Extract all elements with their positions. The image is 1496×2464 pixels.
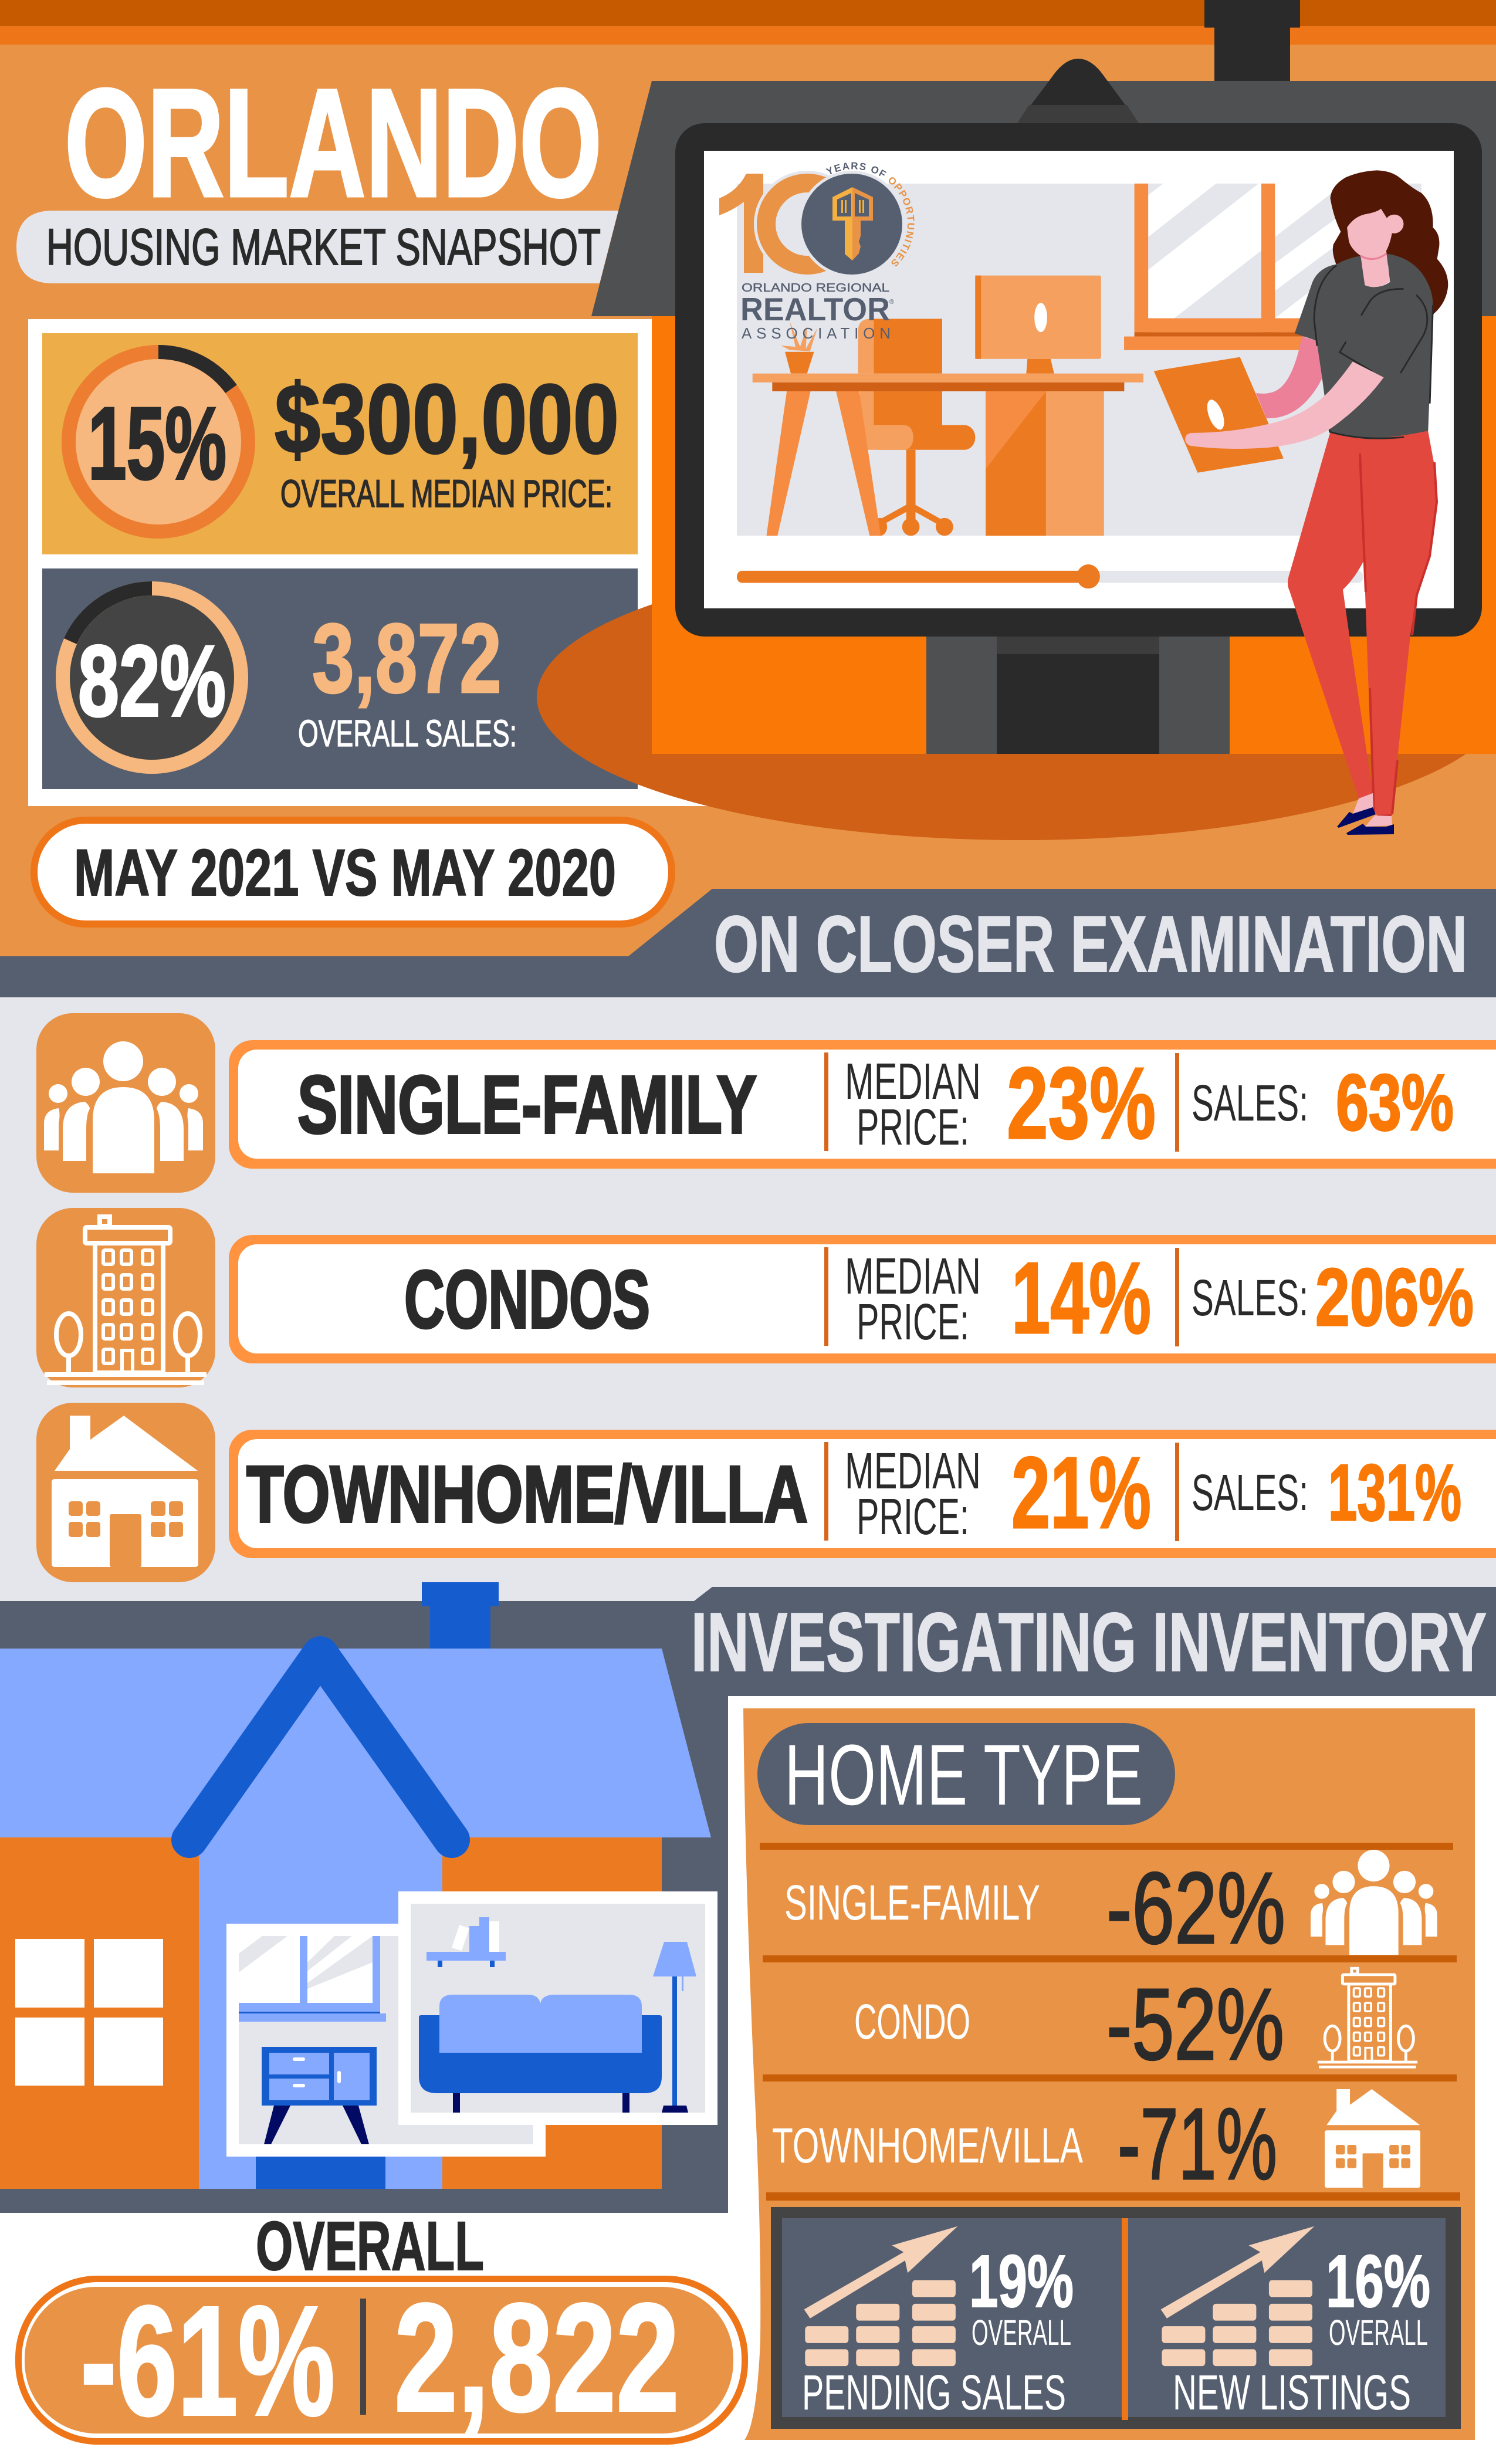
date pill — [31, 817, 675, 928]
neck — [1360, 251, 1390, 287]
roof — [0, 1649, 711, 1837]
panel: overall median price: OVERALL MEDIAN PRICE: — [280, 472, 612, 515]
panel: overall median price: 15% — [88, 387, 226, 501]
logo: Orlando Regional Realtor Association 100 years: ASSOCIATION — [742, 324, 891, 342]
ceiling with chimney mount — [591, 0, 1496, 316]
front arm — [1185, 361, 1384, 449]
row: single-family: SINGLE-FAMILY — [297, 1058, 757, 1150]
chart icon: pending sales — [804, 2226, 957, 2366]
panel: overall sales: 82% — [78, 625, 226, 737]
subtitle pill: HOUSING MARKET SNAPSHOT — [46, 219, 601, 276]
townhome inventory row: -71% — [1118, 2087, 1277, 2201]
header section background — [0, 0, 1496, 962]
plant — [781, 321, 817, 374]
overall heading: OVERALL — [256, 2208, 484, 2285]
panel: home type — [743, 1708, 1475, 2440]
row: condos: PRICE: — [857, 1294, 969, 1351]
room: cabinet — [226, 1924, 546, 2157]
panel: overall sales — [42, 568, 638, 789]
panel: overall median price: $300,000 — [275, 364, 619, 474]
panel: pending sales and new listings — [771, 2207, 1461, 2429]
panel: overall sales: OVERALL SALES: — [298, 712, 517, 754]
roof gable — [189, 1654, 452, 1840]
panel: pending sales and new listings: 19% — [969, 2240, 1074, 2323]
section band: on closer examination — [0, 889, 1496, 997]
house window — [15, 1939, 163, 2086]
title: ORLANDO — [65, 57, 602, 229]
single-family inventory row: -62% — [1106, 1851, 1285, 1965]
townhome inventory row — [772, 2087, 1420, 2201]
icon tile: house — [36, 1403, 215, 1582]
panel: pending sales and new listings: 16% — [1326, 2240, 1430, 2323]
panel: overall sales: 3,872 — [312, 603, 502, 713]
room: sofa — [398, 1891, 717, 2125]
panel: white stats frame — [28, 319, 732, 806]
row: single-family: 23% — [1007, 1046, 1156, 1160]
row: townhome/villa: TOWNHOME/VILLA — [246, 1450, 808, 1539]
logo: Orlando Regional Realtor Association 100 years — [719, 162, 915, 342]
logo: Orlando Regional Realtor Association 100 years: YEARS OF OPPORTUNITIES — [825, 162, 915, 266]
row: single-family: PRICE: — [857, 1099, 969, 1156]
chair — [858, 319, 975, 536]
home type pill — [757, 1723, 1175, 1825]
row: condos: MEDIAN — [845, 1248, 981, 1305]
townhome inventory row: TOWNHOME/VILLA — [772, 2118, 1083, 2173]
subtitle pill — [16, 211, 618, 283]
desktop computer — [975, 276, 1101, 374]
row: condos: SALES: — [1192, 1270, 1308, 1326]
hair — [1330, 170, 1448, 314]
row: townhome/villa: SALES: — [1192, 1464, 1308, 1521]
row: condos — [36, 1208, 1496, 1387]
row: condos: 14% — [1011, 1241, 1151, 1355]
row: single-family — [36, 1013, 1496, 1193]
logo: Orlando Regional Realtor Association 100 years: ORLANDO REGIONAL — [742, 282, 889, 295]
illustration: house cutaway — [0, 1582, 717, 2189]
section band: investigating inventory — [0, 1587, 1496, 2213]
panel: overall median price — [42, 333, 638, 554]
condo inventory row: CONDO — [854, 1994, 970, 2049]
condo inventory row: -52% — [1106, 1967, 1284, 2081]
comparison section background — [0, 997, 1496, 1602]
row: townhome/villa: PRICE: — [857, 1488, 969, 1545]
date pill: MAY 2021 VS MAY 2020 — [74, 836, 616, 909]
monitor stand — [926, 637, 1230, 754]
face — [1347, 209, 1392, 256]
shirt seams — [1314, 265, 1433, 438]
row: condos: CONDOS — [404, 1253, 650, 1345]
overall stats pill: 2,822 — [394, 2272, 679, 2443]
key icon — [832, 187, 873, 260]
single-family inventory row — [784, 1850, 1437, 1965]
row: townhome/villa: MEDIAN — [845, 1443, 981, 1500]
panel: pending sales and new listings: OVERALL — [1329, 2313, 1428, 2353]
home type pill: HOME TYPE — [784, 1727, 1143, 1823]
office wall — [652, 316, 1496, 754]
overall stats pill — [15, 2272, 748, 2448]
overall stats pill: -61% — [80, 2274, 335, 2448]
chart icon: new listings — [1161, 2226, 1314, 2366]
logo: Orlando Regional Realtor Association 100 years: REALTOR — [740, 291, 890, 327]
tablet — [1154, 357, 1284, 473]
illustration: window on screen — [1124, 184, 1421, 350]
icon tile: building — [36, 1208, 215, 1387]
panel: pending sales and new listings: PENDING SALES — [802, 2365, 1066, 2420]
row: single-family: SALES: — [1192, 1075, 1308, 1132]
shirt — [1295, 253, 1433, 439]
woman: legs and shoes — [1288, 431, 1437, 835]
condo inventory row — [854, 1967, 1417, 2081]
row: townhome/villa — [36, 1403, 1496, 1582]
walls — [0, 1837, 662, 2189]
progress slider — [737, 564, 1363, 588]
row: townhome/villa: 21% — [1011, 1436, 1151, 1549]
single-family inventory row: SINGLE-FAMILY — [784, 1875, 1040, 1930]
desk — [753, 374, 1143, 536]
monitor frame and screen — [675, 123, 1482, 637]
logo: Orlando Regional Realtor Association 100 years: ® — [889, 299, 894, 306]
woman: upper body with tablet — [1154, 170, 1448, 473]
floor ellipse — [537, 554, 1496, 840]
back arm — [1256, 337, 1323, 418]
icon tile: people — [36, 1013, 215, 1193]
row: single-family: 63% — [1336, 1058, 1454, 1147]
panel: pending sales and new listings: OVERALL — [972, 2313, 1071, 2353]
illustration: office scene on screen — [737, 276, 1363, 588]
chimney — [422, 1582, 499, 1649]
row: single-family: MEDIAN — [845, 1053, 981, 1110]
